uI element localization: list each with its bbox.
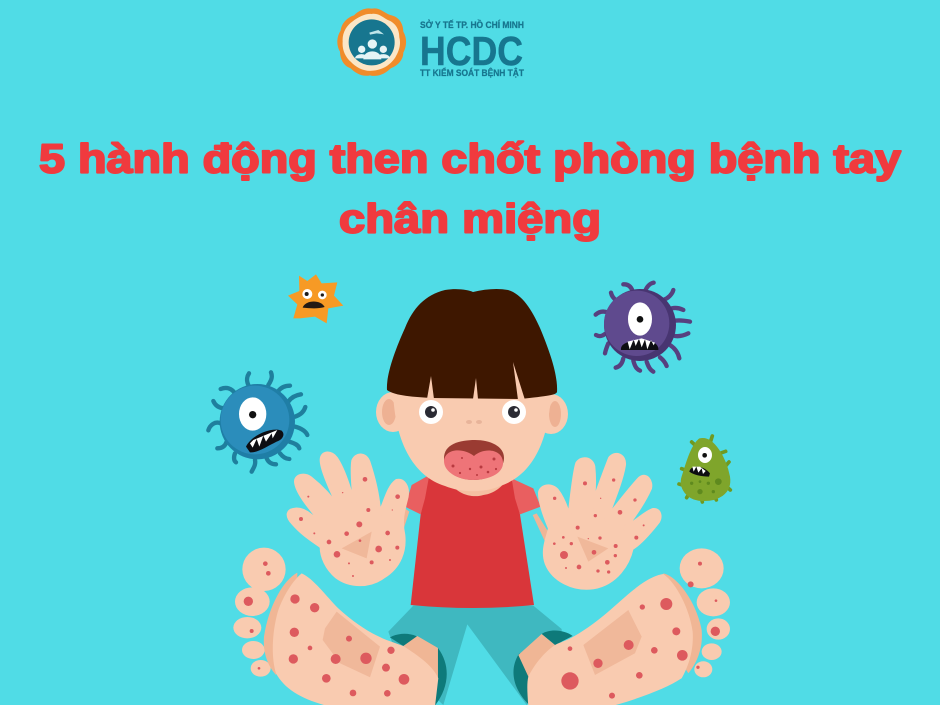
logo text: HCDC: HCDC xyxy=(420,28,523,74)
rash spots xyxy=(561,562,720,699)
right foot with rash xyxy=(513,548,730,705)
hair fringe gaps xyxy=(427,362,525,400)
mouth xyxy=(444,440,504,480)
neck xyxy=(448,478,508,496)
sole xyxy=(273,573,438,705)
eye right xyxy=(502,400,526,424)
body xyxy=(220,384,295,459)
germ: orange xyxy=(288,274,343,323)
rash spots xyxy=(553,478,645,574)
leg cuff xyxy=(513,630,573,705)
shirt body xyxy=(411,475,534,608)
face xyxy=(393,380,551,491)
palm crease xyxy=(577,537,608,562)
child body: shirt and shorts xyxy=(388,475,562,705)
eye xyxy=(239,397,266,431)
sole xyxy=(527,574,693,705)
ankle xyxy=(403,636,438,678)
left hand with rash xyxy=(289,454,407,584)
hand outline xyxy=(289,454,407,584)
tongue with spots xyxy=(444,450,503,480)
arch xyxy=(323,612,380,677)
germ: blue xyxy=(208,372,307,472)
child head xyxy=(376,289,568,491)
tentacles xyxy=(596,283,690,372)
toes xyxy=(233,548,286,677)
germ: green xyxy=(679,436,730,502)
teeth xyxy=(250,430,277,448)
left foot with rash xyxy=(233,548,447,705)
title xyxy=(39,136,901,242)
mouth xyxy=(621,340,658,350)
right sleeve xyxy=(512,478,541,514)
icon: HCDC emblem xyxy=(337,8,406,76)
palm crease xyxy=(342,532,372,558)
body xyxy=(682,440,729,499)
body xyxy=(604,289,676,361)
title line 1: 5 hành động then chốt phòng bệnh tay xyxy=(39,136,901,182)
eye left xyxy=(419,400,443,424)
tentacles xyxy=(208,372,307,472)
logo text: center name: TT KIỂM SOÁT BỆNH TẬT xyxy=(420,67,524,79)
spikes xyxy=(679,436,730,502)
leg cuff xyxy=(390,634,447,705)
shorts xyxy=(388,606,562,705)
ears xyxy=(376,392,568,434)
mouth xyxy=(246,430,283,452)
sole toe band xyxy=(264,573,297,675)
ankle xyxy=(518,634,555,677)
arch xyxy=(583,610,642,675)
sole toe band xyxy=(663,573,702,673)
logo text: department: SỞ Y TẾ TP. HỒ CHÍ MINH xyxy=(420,19,524,31)
left sleeve xyxy=(405,475,429,514)
toes xyxy=(680,548,730,677)
eye xyxy=(698,447,712,463)
teeth and spots xyxy=(690,467,722,494)
rash spots xyxy=(244,561,409,697)
germ: purple xyxy=(596,283,690,372)
teeth xyxy=(628,338,655,349)
rash spots xyxy=(299,477,400,577)
mouth xyxy=(689,466,710,477)
eye xyxy=(628,302,652,336)
hair xyxy=(387,289,557,399)
logo: HCDC xyxy=(337,8,524,79)
right hand with rash xyxy=(540,455,660,588)
arms xyxy=(399,508,551,542)
nose xyxy=(466,420,482,424)
hand outline xyxy=(540,455,660,588)
title line 2: chân miệng xyxy=(339,196,601,242)
